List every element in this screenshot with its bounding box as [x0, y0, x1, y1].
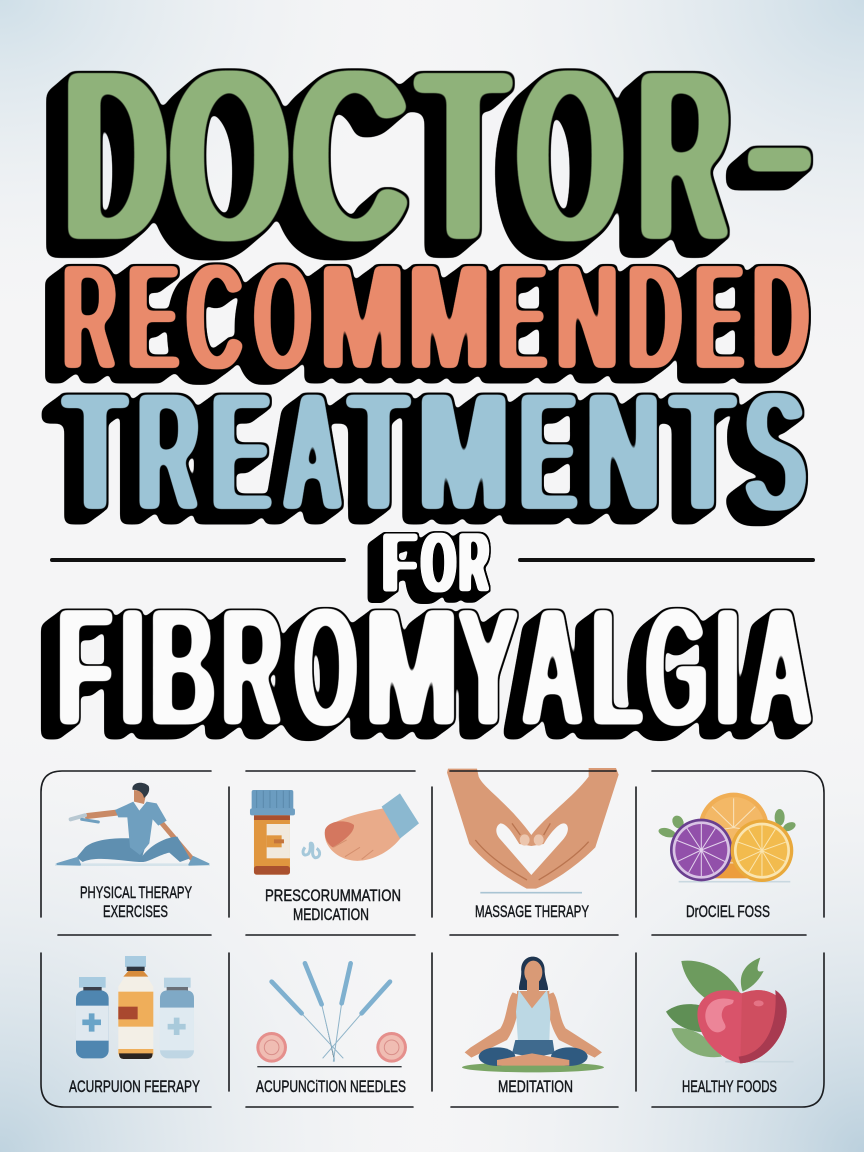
heading line: RECOMMENDED: M	[320, 228, 404, 404]
heading line: FOR: O	[422, 514, 456, 611]
heading line: FIBROMYALGIA: R	[221, 570, 282, 763]
heading line: TREATMENTS: E	[211, 355, 271, 550]
icon: cupped hands	[447, 768, 619, 893]
label: special foods: DrOCIEL FOSS	[686, 903, 770, 921]
heading line: RECOMMENDED: D	[627, 230, 682, 405]
heading line: TREATMENTS: S	[745, 354, 806, 550]
icon: apple with leaves	[666, 958, 794, 1063]
heading line: TREATMENTS: A	[283, 353, 342, 549]
heading line: DOCTOR-: D	[65, 16, 167, 297]
heading line: TREATMENTS: T	[671, 354, 734, 550]
heading line: DOCTOR-: O	[517, 15, 623, 298]
icon: needles and pressure points	[256, 963, 407, 1067]
heading line: FIBROMYALGIA: M	[365, 570, 459, 763]
heading line: FIBROMYALGIA: L	[591, 571, 642, 763]
heading line: RECOMMENDED: M	[408, 228, 490, 405]
heading line: TREATMENTS: N	[587, 355, 660, 550]
heading line: RECOMMENDED: R	[62, 231, 117, 405]
icon: person stretching	[55, 783, 210, 865]
heading line: TREATMENTS	[64, 353, 806, 550]
icon: pill bottle and hand	[250, 790, 419, 875]
icon: three medicine bottles	[76, 956, 194, 1059]
label: acupuncture needles: ACUPUNCiTION NEEDLES	[256, 1078, 406, 1096]
heading line: FOR: F	[382, 514, 417, 612]
heading line: FIBROMYALGIA: F	[57, 572, 113, 764]
label: acupuncture therapy: ACURPUION FEERAPY	[69, 1078, 200, 1096]
label: prescription medication: PRESCORUMMATION	[265, 887, 401, 905]
heading line: RECOMMENDED: C	[186, 230, 244, 405]
label: physical therapy exercises: PHYSICAL THERAPY	[80, 884, 192, 902]
heading line: RECOMMENDED: O	[254, 230, 311, 406]
heading line: TREATMENTS: M	[419, 353, 509, 549]
heading line: DOCTOR-: C	[292, 15, 410, 298]
label: massage therapy: MASSAGE THERAPY	[475, 903, 589, 921]
heading line: RECOMMENDED: N	[556, 229, 619, 404]
panel: special foods	[657, 793, 797, 921]
heading line: FIBROMYALGIA: A	[750, 571, 812, 763]
heading line: FIBROMYALGIA: I	[715, 572, 740, 764]
panel: healthy foods	[666, 958, 794, 1096]
heading line: DOCTOR-: R	[639, 15, 730, 297]
heading line: DOCTOR-	[65, 0, 813, 298]
heading line: FIBROMYALGIA: O	[294, 571, 357, 764]
label line 2: EXERCISES	[103, 903, 168, 921]
icon: person meditating	[462, 957, 604, 1072]
label line 2: MEDICATION	[293, 906, 369, 924]
label: healthy foods: HEALTHY FOODS	[682, 1078, 777, 1096]
heading line: DOCTOR-: T	[418, 14, 508, 297]
heading line: TREATMENTS: R	[138, 355, 199, 550]
panel: acupuncture therapy bottles	[69, 956, 200, 1096]
heading line: FIBROMYALGIA: Y	[457, 572, 519, 764]
heading line: RECOMMENDED: D	[752, 231, 809, 405]
heading line: TREATMENTS: T	[64, 355, 126, 550]
heading line: TREATMENTS: E	[520, 355, 577, 550]
title	[57, 0, 813, 764]
heading line: FIBROMYALGIA	[57, 570, 812, 764]
heading line: FIBROMYALGIA: B	[150, 571, 215, 764]
heading line: FOR: R	[460, 515, 488, 612]
heading line: RECOMMENDED	[62, 228, 809, 406]
panel: meditation	[462, 957, 604, 1096]
heading line: FIBROMYALGIA: G	[646, 573, 708, 764]
panel: massage therapy	[447, 768, 619, 921]
heading line: DOCTOR-: O	[170, 15, 289, 297]
heading line: TREATMENTS: T	[349, 355, 408, 550]
panel: acupuncture needles	[256, 963, 407, 1096]
heading line: FIBROMYALGIA: I	[120, 572, 145, 764]
heading line: RECOMMENDED: E	[498, 230, 547, 405]
heading line: FIBROMYALGIA: A	[522, 571, 583, 763]
panel: prescription medication	[250, 790, 419, 924]
heading line: RECOMMENDED: E	[695, 230, 744, 405]
icon: citrus slices	[657, 793, 797, 882]
label: meditation: MEDITATION	[498, 1078, 573, 1096]
heading line: FOR	[382, 514, 488, 612]
heading line: RECOMMENDED: E	[127, 231, 180, 405]
panel: physical therapy exercises	[55, 783, 210, 921]
